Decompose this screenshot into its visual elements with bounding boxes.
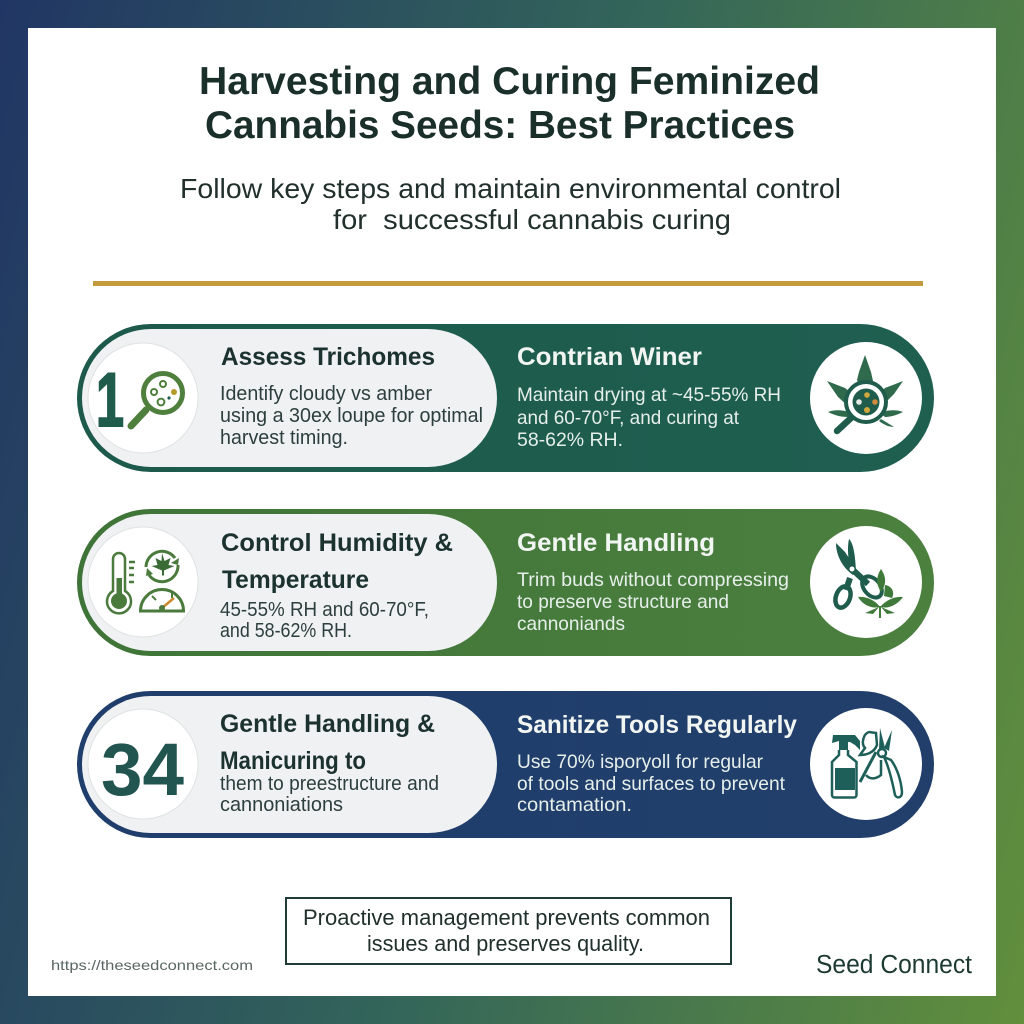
brand name: Seed Connect [816, 951, 972, 979]
row 2 pill background [77, 509, 934, 656]
row 3 right body: of tools and surfaces to prevent [517, 773, 786, 795]
row 3 left heading: Gentle Handling & [220, 710, 435, 738]
row 1 left heading: Assess Trichomes [221, 343, 435, 371]
icon: thermometer, leaf cycle and gauge [88, 527, 198, 637]
callout: footer message [286, 898, 731, 964]
row 2 left body: 45-55% RH and 60-70°F, [220, 599, 429, 621]
row 1 right body: Maintain drying at ~45-55% RH [517, 384, 781, 406]
row 3 right heading: Sanitize Tools Regularly [517, 711, 797, 739]
row 3 left heading: Manicuring to [220, 747, 366, 775]
row 3 left body [220, 773, 439, 816]
row 3 pill background [77, 691, 934, 838]
row 2 right body: to preserve structure and [517, 591, 729, 613]
panel: row 3 [77, 691, 934, 838]
row 1 left body [220, 383, 483, 449]
row 2 left body [220, 599, 429, 642]
row 3 left body: cannoniations [220, 794, 343, 816]
icon: spray bottle and pruners [810, 708, 922, 820]
callout: footer message: Proactive management prevents common [303, 905, 710, 930]
row 2 right body: Trim buds without compressing [517, 569, 789, 591]
row 1 right body: 58-62% RH. [517, 429, 623, 451]
source url: https://theseedconnect.com [51, 957, 253, 973]
row 2 right heading: Gentle Handling [517, 529, 715, 557]
row 2 left heading [221, 529, 453, 594]
subtitle: for successful cannabis curing [333, 204, 731, 235]
row 3 left heading [220, 710, 435, 775]
row 2 left heading: Temperature [222, 566, 369, 594]
step 34 badge [88, 709, 198, 819]
row 3 left body: them to preestructure and [220, 773, 439, 795]
panel: row 1 [77, 324, 934, 472]
row 1 right heading: Contrian Winer [517, 343, 702, 371]
gold divider [93, 281, 923, 286]
subtitle [180, 173, 841, 235]
title: Harvesting and Curing Feminized [199, 60, 820, 103]
row 1 pill background [77, 324, 934, 472]
row 3 right body: Use 70% isporyoll for regular [517, 751, 763, 773]
row 1 right body: and 60-70°F, and curing at [517, 407, 740, 429]
title: Cannabis Seeds: Best Practices [205, 104, 795, 147]
row 1 right body [517, 384, 781, 451]
row 2 left section [82, 514, 497, 651]
row 3 right body: contamation. [517, 794, 632, 816]
step 34 badge: 34 [101, 728, 184, 811]
icon: scissors and leaf [810, 526, 922, 638]
row 2 left heading: Control Humidity & [221, 529, 453, 557]
row 3 right body [517, 751, 786, 816]
subtitle: Follow key steps and maintain environmental control [180, 173, 841, 204]
row 1 left body: using a 30ex loupe for optimal [220, 405, 483, 427]
row 1 left section [82, 329, 497, 467]
row 1 left body: harvest timing. [220, 427, 348, 449]
panel: row 2 [77, 509, 934, 656]
icon: cannabis leaf with loupe [810, 342, 922, 454]
callout: footer message: issues and preserves quality. [367, 931, 644, 956]
row 3 left section [82, 696, 497, 833]
row 1 left body: Identify cloudy vs amber [220, 383, 432, 405]
row 2 left body: and 58-62% RH. [220, 620, 352, 642]
row 2 right body: cannoniands [517, 613, 625, 635]
title [199, 60, 820, 147]
row 2 right body [517, 569, 789, 635]
step 1 badge [88, 343, 198, 453]
step 1 badge: 1 [96, 358, 124, 443]
